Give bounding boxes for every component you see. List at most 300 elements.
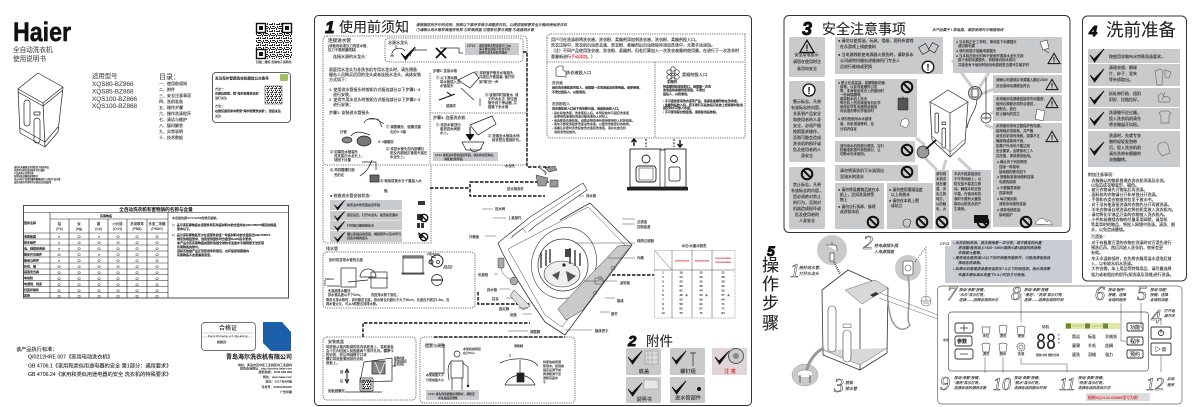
accessories: 螺钉组 bbox=[680, 367, 696, 375]
hazardous substances table: O bbox=[57, 270, 61, 275]
water level table: 58 bbox=[679, 302, 683, 306]
hazardous substances table: O bbox=[135, 276, 139, 281]
water level table: 6 bbox=[662, 293, 664, 297]
water level table: 77 bbox=[721, 306, 725, 310]
panel: connect water inlet: 完约定 bbox=[334, 172, 345, 177]
certificate of conformity bbox=[202, 322, 256, 350]
product title bbox=[13, 45, 53, 63]
program names: 羊绒衣 bbox=[1105, 333, 1117, 339]
water level table: 71 bbox=[721, 302, 725, 306]
warning tiles middle bbox=[835, 37, 991, 229]
hazardous substances table: 电源线、线束 bbox=[24, 281, 42, 286]
checklist: 将衣物展开抖松。 bbox=[1109, 121, 1141, 127]
additional notes: 等柔滑时的物品，将投入网袋中洗涤。清洗、脱 bbox=[1091, 221, 1175, 227]
water level table: 20 bbox=[699, 270, 703, 274]
step labels 4-12: 按动"参数"按键， bbox=[959, 287, 987, 292]
hazardous substances table: 镉 bbox=[97, 221, 101, 226]
additional notes: - 手袋和衣类衣物放到包里不放水中。 bbox=[1089, 196, 1155, 202]
water level table: 56 bbox=[699, 298, 703, 302]
warning tiles right: ● 每次使用前 bbox=[997, 196, 1018, 201]
hazardous substances table: (Cd) bbox=[95, 227, 102, 231]
hazardous substances table: O bbox=[135, 264, 139, 269]
WeChat account card bbox=[212, 72, 290, 122]
warning tiles right: 电源的接线 bbox=[999, 179, 1017, 184]
step labels 4-12: 选择合适的漂洗次数 bbox=[954, 385, 987, 390]
warning tiles middle: 或改装本机 bbox=[840, 209, 859, 214]
program names: 筒洁 bbox=[1072, 333, 1080, 339]
table of contents bbox=[159, 73, 191, 140]
warning tiles middle: 请勿将清洗机下水流淌出 bbox=[840, 167, 884, 173]
hazardous substances table: O bbox=[155, 282, 159, 287]
heading: section 1: 1 bbox=[325, 18, 334, 37]
additional notes: 附加注意事项： bbox=[1088, 171, 1116, 177]
panel: install base cover: 底盖固定 bbox=[394, 362, 405, 366]
heading: section 5: 操 bbox=[762, 256, 779, 275]
safety center washer icon bbox=[916, 55, 1010, 170]
panel: inlet checks: 其连水阀的接头 bbox=[347, 235, 368, 240]
step illustration: hose to washer: ① 将进水管顶出 bbox=[436, 122, 461, 127]
hazardous substances table: O bbox=[97, 276, 101, 281]
step illustration: hose to washer: 套到进水阀座 bbox=[440, 126, 461, 131]
side buttons: 功能 bbox=[1130, 324, 1140, 331]
step illustration: hose to washer: 并旋拉开管接套, 套拧好 bbox=[479, 74, 515, 79]
hazardous substances table: (Pb) bbox=[56, 227, 63, 231]
warning tiles right: 请确认电源规定电源插入额定250V bbox=[996, 77, 1049, 82]
softener inlet bbox=[663, 67, 743, 114]
WeChat account card: 在微信通讯录中搜索"海尔智慧洗衣机"，然后关注 bbox=[215, 108, 281, 113]
warning tiles right: 接下来的电源插头，将软管内的水排出 bbox=[958, 57, 1016, 62]
warning tiles middle: 有机溶剂等化学使用时 bbox=[840, 108, 875, 113]
step labels 4-12: 选择合适的脱水时间 bbox=[1014, 385, 1047, 390]
timer display: 预约/小时 预约/分钟 bbox=[1036, 353, 1059, 357]
warning tiles middle: 员进行维修或更换 bbox=[840, 63, 872, 69]
panel: connect water inlet: 请按放(部)紧固 bbox=[444, 157, 463, 161]
warning tiles right bbox=[953, 37, 1062, 227]
step labels 1-3: 打开水龙头 bbox=[799, 271, 820, 276]
panel: connect water inlet: 出约3~4毫 bbox=[390, 129, 407, 134]
hazardous substances table: O bbox=[155, 246, 159, 251]
step labels 1-3: 排水管 bbox=[845, 386, 858, 391]
hazardous substances table: 规定的限量要求，但所使用部件符合欧盟RoHS指令要求。 bbox=[177, 236, 254, 241]
step illustration: hose to washer: ③ 旋紧同时接管水, 请 bbox=[485, 92, 519, 97]
hazardous substances table: (PBDE) bbox=[151, 227, 163, 231]
step labels 4-12: 6 bbox=[1095, 283, 1105, 305]
warning tiles middle: ● 请勿自行拆卸、修理 bbox=[838, 204, 876, 209]
step labels 4-12: "水位"显示灯亮， bbox=[959, 292, 987, 297]
status strip bbox=[1065, 323, 1120, 329]
panel: placement and adjustment bbox=[420, 337, 575, 403]
step labels 1-3: 1 bbox=[790, 260, 800, 282]
legend tiles: 有该标志的内容， bbox=[791, 187, 823, 193]
detergent inlet: • 请勿不要使用固含洗液进洗净液，以便洗涤能更好的效果。 bbox=[552, 121, 632, 126]
part callout labels: 挂耳 bbox=[492, 296, 499, 301]
table of contents: 八、疑问解答 bbox=[159, 122, 183, 128]
accessories: 注 意 bbox=[724, 367, 736, 375]
panel: detergent and softener inlets bbox=[547, 34, 745, 138]
water level table: XQS100-BZ868 bbox=[715, 262, 731, 264]
warning tiles middle: 使用化学性电器排放使用 bbox=[840, 104, 877, 109]
hazardous substances table: O bbox=[77, 234, 81, 239]
QR code bbox=[256, 23, 292, 64]
legend tiles: 和使用者的人身 bbox=[793, 116, 821, 122]
step labels 4-12: 10 bbox=[993, 374, 1011, 394]
hazardous substances table: O bbox=[57, 294, 61, 298]
icon: drain hose bbox=[792, 348, 824, 386]
note box: • 本机初始洗涤，首次使用是一次可洗，或不稳定的水量 bbox=[953, 240, 1042, 245]
warning tiles right: 确接地或接地不良， bbox=[996, 138, 1027, 143]
additional notes: - 请勿将化学溶品污染的衣物放入洗衣机内。 bbox=[1089, 211, 1167, 217]
panel: connect water inlet: ① 调整螺丝，使螺丝露 bbox=[386, 124, 421, 129]
hazardous substances table: O bbox=[155, 288, 159, 293]
hazardous substances table: 铅 bbox=[58, 221, 62, 226]
panel: inlet checks bbox=[323, 165, 431, 243]
step illustration: hose to washer: ① 以下滑动器, bbox=[436, 75, 458, 80]
step labels 4-12: 7 bbox=[947, 283, 958, 305]
step illustration: hose to washer: 无时水走去, 按住固 bbox=[488, 96, 518, 101]
water level table: XQS80-BZ866 bbox=[675, 260, 690, 262]
WeChat account card: 方法一 bbox=[215, 86, 224, 91]
warning tiles middle: ● 请勿使用潮湿温度 bbox=[889, 187, 923, 192]
product standards: GB 4706.24《家用和类似用途电器的安全 洗衣机的特殊要求》 bbox=[28, 370, 171, 378]
detergent inlet: 洗衣液投放入口前下洗衣粉分量，请量取后投入口。 bbox=[552, 106, 621, 110]
legend tiles: ! bbox=[807, 86, 811, 97]
panel: 3 safety precautions bbox=[784, 16, 1070, 232]
hazardous substances table: × bbox=[58, 240, 61, 245]
function icons: 浸泡 bbox=[1018, 333, 1025, 338]
sub panel: tap first: CF12 bbox=[467, 44, 475, 48]
water level table: 24 bbox=[679, 275, 683, 279]
warning tiles middle: 防触电防损坏到的部分，让 bbox=[840, 147, 881, 152]
step illustration: hose to washer: 水管接头 bbox=[440, 83, 454, 88]
legend tiles: 的行为，否则对 bbox=[793, 199, 821, 205]
checklist: 清理衣袋、棉球 bbox=[1109, 64, 1137, 70]
hazardous substances table: O bbox=[57, 252, 61, 257]
model list bbox=[92, 71, 138, 110]
warning tiles right: 或切换电源 bbox=[958, 43, 976, 48]
additional notes: 以免造成衣物变形、褪色。 bbox=[1091, 182, 1139, 188]
control panel detail bbox=[879, 283, 1182, 404]
panel: install base cover: 后 bbox=[340, 378, 344, 383]
heading: section 3 bbox=[802, 19, 906, 39]
additional notes: - 面料松的衣物请分开和单独分开洗涤。 bbox=[1089, 191, 1159, 197]
warning tiles right: 连接电线 bbox=[999, 190, 1013, 195]
table of contents: 五、操作步骤 bbox=[159, 104, 183, 110]
checklist: 投入洗衣机前清先 bbox=[1109, 115, 1141, 121]
table of contents: 四、洗前准备 bbox=[159, 98, 183, 104]
water level table: 36 bbox=[679, 284, 683, 288]
additional notes: - 冬天水温较低时，应先将衣服用温水浸泡后放 bbox=[1089, 255, 1171, 261]
softener inlet: • 不可使用超过规量值，请按取出投放取。 bbox=[663, 109, 719, 114]
warning tiles middle: 以上的热水 bbox=[891, 192, 910, 197]
step labels 4-12: 打开电 bbox=[1164, 308, 1175, 313]
step illustration: hose to washer: 锁紧件 bbox=[446, 103, 457, 108]
additional notes: - 对于有极重污渍的衣物在洗涤时对污渍先进行 bbox=[1089, 239, 1171, 245]
panel: drain hose: 则水管太长，可从A附配合排排水管。 bbox=[326, 301, 379, 306]
water level table: 5 bbox=[662, 288, 664, 292]
hazardous substances table: O bbox=[116, 294, 120, 298]
program names: 羊毛 bbox=[1088, 342, 1096, 348]
additional notes: - 被污衣物请先污物染后再洗涤。 bbox=[1089, 186, 1147, 192]
hazardous substances table: O bbox=[135, 234, 139, 239]
warning tiles middle: ! bbox=[926, 62, 930, 72]
step labels 4-12: 5 bbox=[1137, 283, 1147, 305]
accessories: 说明书 bbox=[636, 395, 652, 403]
warning tiles middle: 着柴胶水机上洗衣 bbox=[840, 96, 868, 101]
additional notes: 污渍处： bbox=[1091, 233, 1107, 239]
panel: install base cover: 会十孔内回固入前固盖两个类环孔内。翻摩卡 bbox=[326, 348, 394, 353]
hazardous substances table: O bbox=[135, 282, 139, 287]
panel: connect water inlet: 针管 bbox=[340, 129, 347, 134]
hazardous substances table: (CrVI) bbox=[113, 227, 122, 231]
fine print bbox=[14, 165, 61, 184]
checklist: 请先洗带有细缝的 bbox=[1109, 150, 1141, 156]
fine print: 本公司对产品保留最终解释权利 以实际产品为准 bbox=[14, 177, 61, 181]
hazardous substances table: O bbox=[97, 264, 101, 269]
plus minus buttons bbox=[943, 323, 973, 359]
hazardous substances table: O bbox=[135, 270, 139, 275]
warning tiles middle: 振动以防洗衣机产 bbox=[954, 201, 982, 206]
warning tiles middle: 在水游戏上排废查料 bbox=[840, 43, 876, 49]
hazardous substances table: O bbox=[77, 258, 81, 263]
hazardous substances table: 旋钮与控件 bbox=[24, 258, 39, 262]
detergent inlet: 不要过量投入，以致溢出。 bbox=[552, 89, 588, 94]
softener inlet: • 柔顺剂投放入后，若不要打开投放后可先放上按摩即时取出 bbox=[663, 102, 743, 107]
panel: placement and adjustment: 本使前面大不 bbox=[426, 372, 444, 377]
hazardous substances table: O bbox=[135, 246, 139, 251]
step illustration: hose to washer: 固紧下来水管 bbox=[488, 104, 509, 109]
step illustration: hose to washer: 将水管插入连 bbox=[440, 79, 461, 84]
step labels 4-12: 合适的程序 bbox=[1108, 297, 1127, 302]
note box: 洗涤量/是洗涤上7408~3989/调洗/4或4或适的洗涤物 bbox=[958, 245, 1042, 250]
part callout labels: 进水管部件 bbox=[507, 186, 525, 191]
water level table: 50 bbox=[699, 293, 703, 297]
legend tiles: 请您在使用时注 bbox=[793, 58, 821, 64]
panel: install base cover: 将底盖从箱内取掉的洗衣机底盖上，将底盖各 bbox=[326, 344, 394, 349]
section 5 operation steps bbox=[762, 232, 1182, 404]
table of contents: 三、安全注意事项 bbox=[159, 92, 191, 98]
hazardous substances table: 稳定开关组件 bbox=[24, 252, 42, 256]
checklist: 衣物翻转。 bbox=[1109, 156, 1129, 162]
additional notes: 强力或者相应的程序(如洗涤及羽绒)进行洗涤。 bbox=[1091, 271, 1174, 277]
legend tiles: 禁止标志，凡带 bbox=[793, 181, 821, 187]
step illustration: inlet hose fitting bbox=[342, 118, 384, 182]
warning tiles middle: 平稳，在使用和洗 bbox=[954, 191, 982, 196]
legend tiles: 安全，必须严格 bbox=[793, 122, 821, 128]
warning tiles middle: 等在机上的洗涤液有机化学 bbox=[840, 100, 881, 105]
heading: section 1: 使用前须知 bbox=[339, 19, 409, 35]
panel: drain hose: 改进排水管下到位。 bbox=[371, 292, 400, 297]
WeChat account card: 关注海尔智能洗衣机微信公众账号 bbox=[215, 76, 269, 80]
warning tiles middle: 请勿用水机的部分清洗，另行 bbox=[840, 143, 885, 148]
sub panel: tap first: 请不要在连接不符合不当 bbox=[479, 47, 510, 51]
product standards bbox=[16, 345, 171, 378]
detergent inlet: • 请在投放洗液，洗涤液投入后。本剂投放时可固定洗涤液 bbox=[552, 110, 629, 115]
part callout labels: 度杆 bbox=[611, 311, 618, 316]
table of contents: 一、使用前须知 bbox=[159, 80, 187, 86]
QR code: 扫描二维码 查看电子说明书 bbox=[256, 59, 292, 64]
hazardous substances table: O bbox=[116, 246, 120, 251]
detergent inlet: • 请选择洗衣液投放。请按说明洗涤有使用使用投入时的投放。 bbox=[552, 118, 635, 122]
power cord and drain parts bbox=[498, 258, 530, 310]
function icons: 水位 bbox=[983, 333, 990, 338]
manufacturer address bbox=[226, 353, 292, 394]
icon: power plug bbox=[888, 247, 931, 329]
additional notes: - 对于没有能直接洗涤的衣物先分开再做洗涤。 bbox=[1089, 201, 1171, 207]
water level table: 9 bbox=[662, 306, 664, 310]
heading: section 3: 安全注意事项 bbox=[822, 21, 906, 37]
panel: connect water inlet: ④ 再将酸螺钉组 bbox=[330, 167, 355, 172]
step labels 4-12: "浸泡"、"洗涤"显示灯亮, bbox=[1024, 292, 1063, 297]
heading: section 2 accessories: 附件 bbox=[646, 334, 673, 349]
panel: connect water inlet: ③ 如果松水管端头 bbox=[330, 149, 359, 154]
timer display bbox=[1036, 324, 1060, 357]
warning tiles middle: ● 禁止在高温高、易爆物和的使 bbox=[838, 80, 886, 85]
warning tiles middle: 或站立 bbox=[891, 203, 903, 208]
legend tiles: 安全用电提示: bbox=[794, 51, 820, 57]
warning tiles right: 并检查有不使用时使用电源线是否损坏并维护好 bbox=[958, 62, 1030, 67]
hazardous substances table: O bbox=[155, 264, 159, 269]
warning tiles right: 必须使用带有过载保护的电源。 bbox=[996, 123, 1043, 128]
hazardous substances table: 多溴二苯醚 bbox=[149, 221, 166, 226]
blue label bbox=[263, 322, 291, 351]
WeChat account card: 在微信搜索，搜"海尔智慧洗衣机" bbox=[215, 90, 260, 96]
step illustration: hose to washer: 步骤3: 连接洗衣机 bbox=[433, 114, 465, 120]
legend tiles: 身安全 bbox=[801, 152, 813, 158]
panel: connect water inlet bbox=[323, 36, 527, 193]
side buttons bbox=[1127, 323, 1171, 358]
warning tiles middle: ● 当电源线松使电源器火损伤时，请联系本 bbox=[838, 51, 914, 57]
warning tiles middle: ● 请勿将易燃物品放在本 bbox=[838, 187, 880, 192]
hazardous substances table: O bbox=[116, 288, 120, 293]
WeChat account card: 方法二 bbox=[215, 103, 224, 108]
step labels 1-3: 入电源插座 bbox=[874, 249, 895, 254]
panel: placement and adjustment: 摆置与调整 bbox=[425, 342, 445, 348]
warning tiles right: 安全接地电源线及符合 bbox=[996, 83, 1031, 88]
step labels 4-12: 11 bbox=[1059, 374, 1076, 394]
warning tiles middle: 前物，以免导致爆炸引发 bbox=[840, 84, 878, 89]
sub panel: tap first: 如果水龙头有损坏或者 bbox=[479, 50, 507, 54]
part callout labels: 排水管 bbox=[586, 193, 597, 198]
checklist: 后，投入洗衣机前 bbox=[1109, 144, 1141, 150]
additional notes: - 衣服确认的物质普通衣洗衣机洗涤及水洗。 bbox=[1089, 177, 1167, 183]
hazardous substances table: O bbox=[97, 258, 101, 263]
panel: placement and adjustment: 平 bbox=[543, 380, 546, 384]
hazardous substances table: × bbox=[98, 234, 101, 239]
hazardous substances table: O bbox=[97, 282, 101, 287]
legend tiles: 机器造成损坏或 bbox=[793, 205, 821, 211]
step labels 4-12: 按动"参数"按键， bbox=[1014, 375, 1042, 380]
panel: placement and adjustment: 整到水。控到前 bbox=[543, 363, 564, 368]
checklist: 洗涤物不应过量。 bbox=[1109, 109, 1141, 115]
panel: drain hose: 头部超排水螺丝, bbox=[328, 288, 351, 293]
certificate of conformity: 检验员: bbox=[217, 339, 227, 344]
part callout labels: 调整脚 bbox=[530, 329, 541, 334]
detergent inlet: 洗衣粉投入 bbox=[552, 101, 570, 106]
panel: placement and adjustment: CF12 请先洗涤调整好调整时，调整至 bbox=[428, 392, 475, 396]
step labels 4-12: 选择 -----选择合适的水位 bbox=[959, 297, 999, 302]
fine print: 使用前请仔细阅读说明书 bbox=[14, 174, 39, 178]
warning tiles right: 接地线的情况如下 bbox=[999, 169, 1027, 174]
panel: connect water inlet: 步骤1: 安装进水管接头 bbox=[329, 109, 369, 115]
hazardous substances table: 汞 bbox=[77, 222, 81, 226]
panel: connect water inlet: ② 将进水管头的内部螺钉 bbox=[386, 146, 425, 151]
heading: section 2 accessories: 2 bbox=[627, 333, 637, 350]
manufacturer address: 服务热线：4006 999 999 bbox=[259, 369, 292, 374]
program names bbox=[1072, 333, 1117, 357]
intro note: ①请确认进水管安装是否有异 ②安装底盖 ③摆放位置与调整 ④连接进水管 bbox=[416, 27, 535, 32]
model list: XQS85-BZ868 bbox=[92, 88, 134, 96]
hazardous substances table: O bbox=[155, 240, 159, 245]
step illustration: hose to washer: 管外到下滑动器, 并 bbox=[488, 100, 518, 105]
checklist: 片、纱子、发夹 bbox=[1109, 70, 1137, 76]
part callout labels: 箱体 bbox=[617, 298, 624, 303]
heading: section 4: 洗前准备 bbox=[1106, 20, 1176, 40]
step illustration: hose to washer: ② 按紧进水管接水伸 bbox=[488, 133, 520, 138]
hazardous substances table: 全自动洗衣机有害物质的名称与含量 bbox=[119, 206, 193, 213]
hazardous substances table: 其他 bbox=[24, 292, 30, 298]
accessories bbox=[626, 348, 747, 403]
water level table: 44 bbox=[699, 288, 703, 292]
heading: section 5: 5 bbox=[767, 243, 775, 259]
program names: 童锦 bbox=[1072, 342, 1080, 348]
function icons bbox=[983, 333, 1025, 356]
legend tiles: 洗衣机的损坏或 bbox=[793, 140, 821, 146]
warning tiles right: ● 请按电线连接 bbox=[997, 207, 1021, 212]
hazardous substances table: O bbox=[57, 282, 61, 287]
hazardous substances table: O bbox=[155, 270, 159, 275]
panel: connect water inlet: 连接水源的水龙头： bbox=[333, 53, 369, 59]
water level table: 3 bbox=[662, 280, 664, 284]
warning tiles middle: 涤时不要有大量的 bbox=[954, 196, 982, 201]
product title: 全自动洗衣机 bbox=[13, 45, 53, 54]
panel: inlet checks: 确认接固后的连接，阀接配件以及水管与 bbox=[347, 231, 401, 236]
warning tiles middle: 公司或特约服务进维修所门专业人 bbox=[840, 57, 900, 63]
hazardous substances table: 本产品含有有害物质的部件皆因全球技术发展水平限制而无法实现 bbox=[177, 240, 264, 245]
panel: connect water inlet: 进行安装； bbox=[333, 91, 353, 97]
panel: connect water inlet: 请固下针量 bbox=[334, 157, 352, 162]
water level table: 50 bbox=[721, 288, 725, 292]
cover page panel bbox=[13, 17, 292, 394]
hazardous substances table: O bbox=[77, 252, 81, 257]
panel: install base cover: 的切的，然后再轴移开并将 bbox=[326, 352, 367, 357]
warning tiles right: ● 当本机正在工作时，请勿接下电源插头 bbox=[956, 39, 1017, 44]
hazardous substances table: O bbox=[97, 294, 101, 298]
panel: connect water inlet: 3~4毫螺丝 bbox=[378, 139, 395, 144]
warning tiles middle: 防安放不稳发生移 bbox=[954, 181, 982, 186]
detergent inlet: 请在洗衣液投放时投入，请根据一次洗涤量决定使用量。请使用液， bbox=[552, 84, 642, 90]
part callout labels: 底盖 bbox=[510, 312, 517, 317]
hazardous substances table: 要求以下。 bbox=[177, 226, 192, 231]
water level table: 2 bbox=[662, 275, 664, 279]
warning tiles middle: 湿、多 bbox=[936, 186, 947, 191]
hazardous substances table: 多溴联苯 bbox=[130, 221, 144, 226]
water level table: 67 bbox=[699, 306, 703, 310]
hazardous substances table: O bbox=[116, 264, 120, 269]
product standards: 该产品执行标准： bbox=[16, 345, 58, 353]
manufacturer address: 地址：青岛市高中区工业园区内工业园内 bbox=[238, 362, 292, 367]
note box: • 如果水机是是洗涤是否自然水7.0以下的间选项，用水洗涤等 bbox=[953, 266, 1052, 271]
panel: install base cover: 洗衣机固定 bbox=[394, 359, 407, 363]
note box: 布基本等标准水洗量下3.5小时后才可使用。 bbox=[958, 272, 1028, 277]
model note bbox=[1086, 393, 1150, 401]
hazardous substances table: 减速离合器 bbox=[24, 269, 39, 274]
water level table: 32 bbox=[699, 280, 703, 284]
panel: connect water inlet: 连接进水管 bbox=[328, 37, 351, 44]
panel: detergent and softener inlets: 洗衣过程中，洗衣机自动洗衣液、洗衣粉、柔顺剂后自动按程序添加洗涤中，无需手动添加。 bbox=[551, 42, 715, 48]
fine print: 请妥善保存本说明书以便日后查阅使用 bbox=[14, 180, 51, 184]
part callout labels bbox=[469, 163, 655, 334]
hazardous substances table: O bbox=[116, 270, 120, 275]
